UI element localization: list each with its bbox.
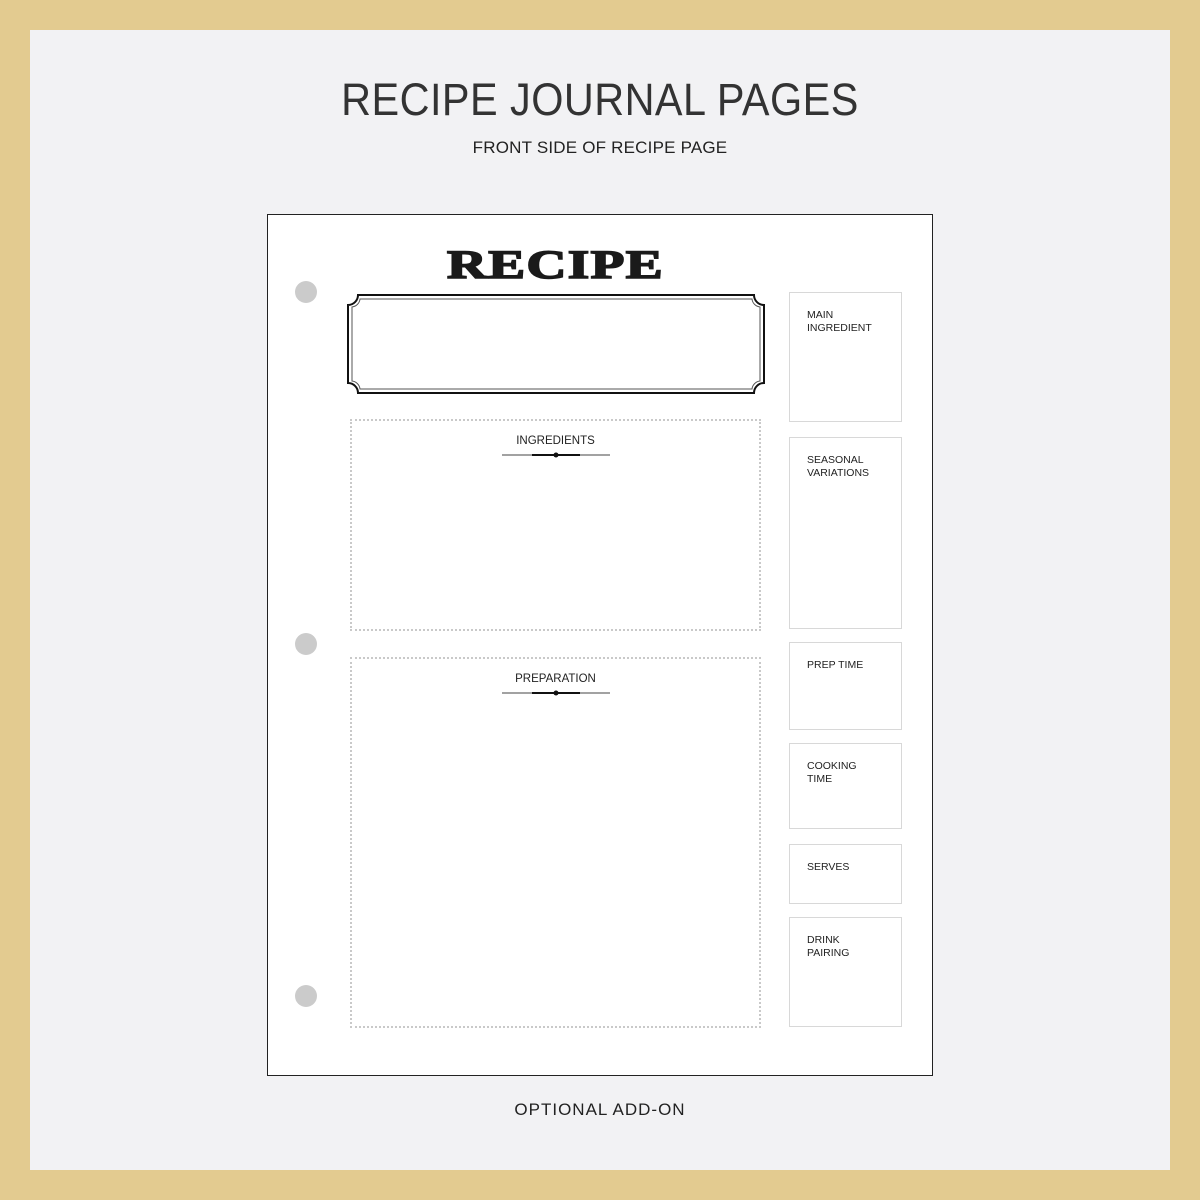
binder holes [295,281,764,1007]
box: drink pairing: PAIRING [807,947,849,959]
box: cooking time: TIME [807,773,832,785]
box: seasonal variations: SEASONAL [807,454,864,466]
box: seasonal variations: VARIATIONS [807,467,869,479]
ornament [502,690,610,696]
ornament [502,452,610,458]
box: serves: SERVES [807,861,849,873]
panel: ingredients [350,419,761,631]
box: seasonal variations [789,437,902,629]
box: drink pairing [789,917,902,1027]
title: RECIPE JOURNAL PAGES [341,74,859,125]
box: cooking time: COOKING [807,760,857,772]
footer text: OPTIONAL ADD-ON [514,1100,686,1119]
box: serves [789,844,902,904]
ingredients label: INGREDIENTS [516,435,595,447]
subtitle: FRONT SIDE OF RECIPE PAGE [473,138,727,157]
box: cooking time [789,743,902,829]
title plaque [347,294,765,394]
box: main ingredient: MAIN [807,309,833,321]
recipe page sheet [267,214,933,1076]
box: main ingredient [789,292,902,422]
preparation label: PREPARATION [515,673,596,685]
panel: preparation [350,657,761,1028]
box: main ingredient: INGREDIENT [807,322,872,334]
box: prep time [789,642,902,730]
box: prep time: PREP TIME [807,659,863,671]
box: drink pairing: DRINK [807,934,840,946]
heading: RECIPE: RECIPE [447,242,664,287]
